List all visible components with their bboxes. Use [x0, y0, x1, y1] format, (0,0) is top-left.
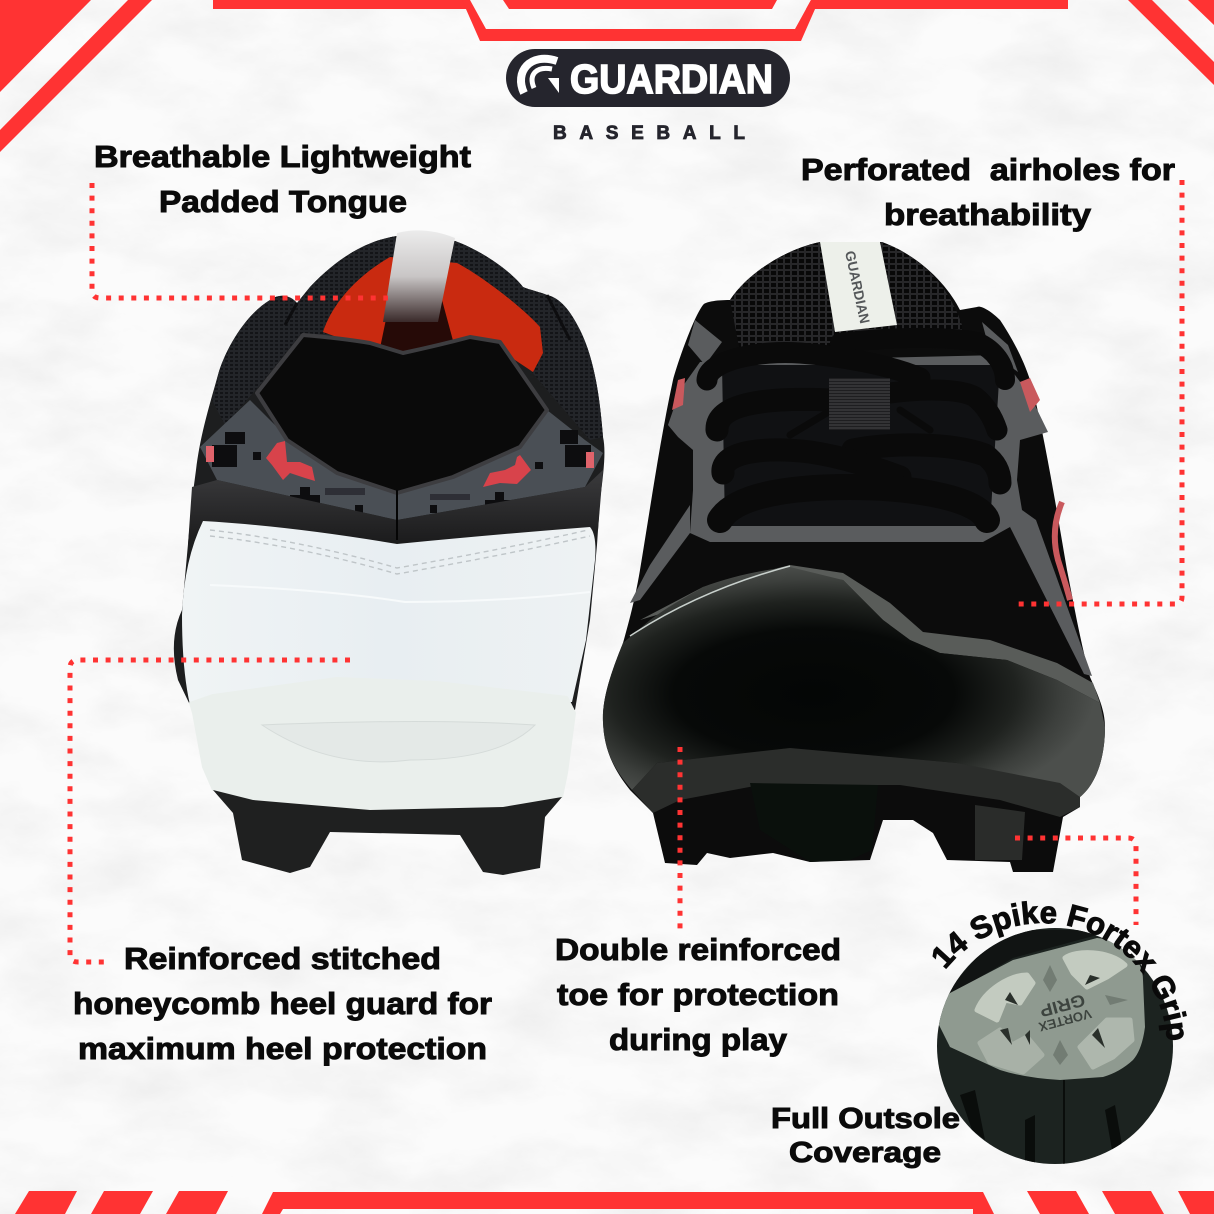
callout line: spikes	[1015, 838, 1136, 925]
sole band	[632, 748, 1080, 817]
text: perforated airholes	[801, 152, 1175, 232]
lower tread	[960, 1080, 1122, 1170]
text: perforated airholes: breathability	[884, 197, 1092, 232]
heel counter	[257, 335, 547, 493]
bottom red frame	[15, 1191, 1214, 1214]
logo: Guardian Baseball: GUARDIAN	[570, 56, 773, 102]
black band above white panel	[188, 470, 603, 546]
black upper wedge	[948, 930, 1096, 996]
text: outsole coverage	[771, 1103, 960, 1169]
pull tab	[383, 230, 455, 322]
text: padded tongue: Breathable Lightweight	[94, 139, 471, 174]
text: heel guard: honeycomb heel guard for	[73, 986, 492, 1021]
tongue label	[820, 242, 897, 332]
callout line: airholes	[1015, 180, 1182, 604]
reinforced toe cap	[603, 567, 1105, 797]
spike lugs	[977, 953, 1132, 1072]
red padded lining	[323, 257, 543, 372]
curved label: 14 Spike Fortex Grip: 14 Spike Fortex Grip	[932, 900, 1187, 1040]
right shoe: front view	[603, 242, 1105, 872]
shoe body	[174, 236, 604, 710]
left shoe: rear view	[174, 230, 604, 875]
shoe silhouette	[603, 242, 1105, 872]
white midsole	[190, 678, 575, 810]
outsole and heel lugs	[213, 790, 562, 875]
lace bed	[722, 365, 1000, 526]
text: padded tongue: Padded Tongue	[159, 184, 407, 219]
text: reinforced toe: Double reinforced	[555, 932, 841, 967]
mesh tongue	[730, 242, 962, 352]
callout line: tongue	[92, 183, 388, 298]
side lug	[975, 805, 1025, 860]
text: reinforced toe: toe for protection	[557, 977, 839, 1012]
text: perforated airholes: Perforated airholes for	[801, 152, 1175, 187]
callout line: heel guard	[70, 660, 350, 962]
collar fold	[285, 295, 570, 340]
sole plate	[938, 938, 1145, 1080]
text: reinforced toe: during play	[609, 1022, 788, 1057]
pink print	[672, 378, 1070, 600]
diamond marks	[1043, 965, 1128, 1065]
white heel guard	[182, 521, 595, 705]
text: padded tongue	[94, 139, 471, 219]
text: heel guard: Reinforced stitched	[124, 941, 441, 976]
lug shadows	[1000, 975, 1105, 1048]
mesh collar	[212, 236, 603, 440]
icon: helmet G	[521, 59, 559, 93]
tongue label: GUARDIAN	[842, 249, 873, 325]
text: outsole coverage: Coverage	[789, 1137, 941, 1169]
text: outsole coverage: Full Outsole	[771, 1103, 960, 1135]
lace keeper loop	[829, 378, 890, 430]
text: heel guard	[73, 941, 492, 1066]
grey eyestay frame	[630, 320, 1092, 676]
top red frame	[0, 0, 1214, 152]
text: heel guard: maximum heel protection	[78, 1031, 487, 1066]
inset: outsole close-up	[937, 928, 1173, 1170]
camo band	[200, 400, 603, 520]
grey toe band	[640, 565, 1100, 703]
logo: Guardian Baseball: BASEBALL	[553, 123, 745, 144]
moulded text: grip: GRIP	[1038, 990, 1087, 1020]
moulded text: vortex: VORTEX	[1037, 1006, 1093, 1035]
logo: Guardian Baseball	[506, 49, 790, 144]
callout line: toe	[678, 747, 682, 930]
front lug	[750, 783, 878, 862]
laces	[707, 338, 1005, 520]
text: reinforced toe	[555, 932, 841, 1057]
